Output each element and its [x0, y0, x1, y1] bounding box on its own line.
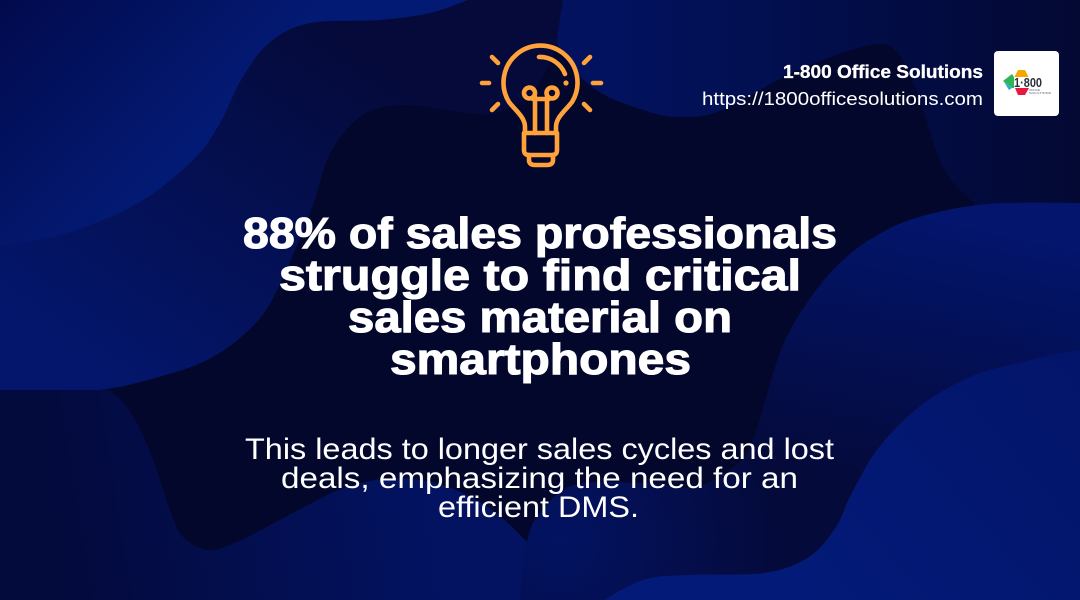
- company name and URL: 1-800 Office Solutions: [783, 62, 983, 82]
- company name and URL: https://1800officesolutions.com: [702, 89, 983, 109]
- logo: 1·800: [1014, 76, 1042, 90]
- background blob: top left: [0, 0, 468, 247]
- body text: efficient DMS.: [438, 491, 639, 524]
- logo: OFFICE: [1029, 88, 1040, 92]
- body text: This leads to longer sales cycles and lost: [245, 433, 835, 466]
- icon: light bulb: [482, 46, 601, 165]
- heading: [243, 209, 837, 384]
- logo: [994, 51, 1059, 116]
- company name and URL: [702, 62, 983, 109]
- heading: sales material on: [348, 293, 732, 342]
- background blob: mid left: [0, 0, 563, 392]
- heading: smartphones: [390, 335, 691, 384]
- background blob: bottom left: [0, 390, 560, 600]
- body text: deals, emphasizing the need for an: [281, 462, 798, 495]
- body text: [245, 433, 835, 524]
- background blob: bottom right: [520, 203, 1080, 600]
- background blob: bottom right bright: [605, 350, 1080, 600]
- heading: 88% of sales professionals: [243, 209, 837, 258]
- background blob: top right: [557, 0, 1080, 210]
- logo: SOLUTIONS: [1029, 91, 1051, 95]
- heading: struggle to find critical: [279, 251, 801, 300]
